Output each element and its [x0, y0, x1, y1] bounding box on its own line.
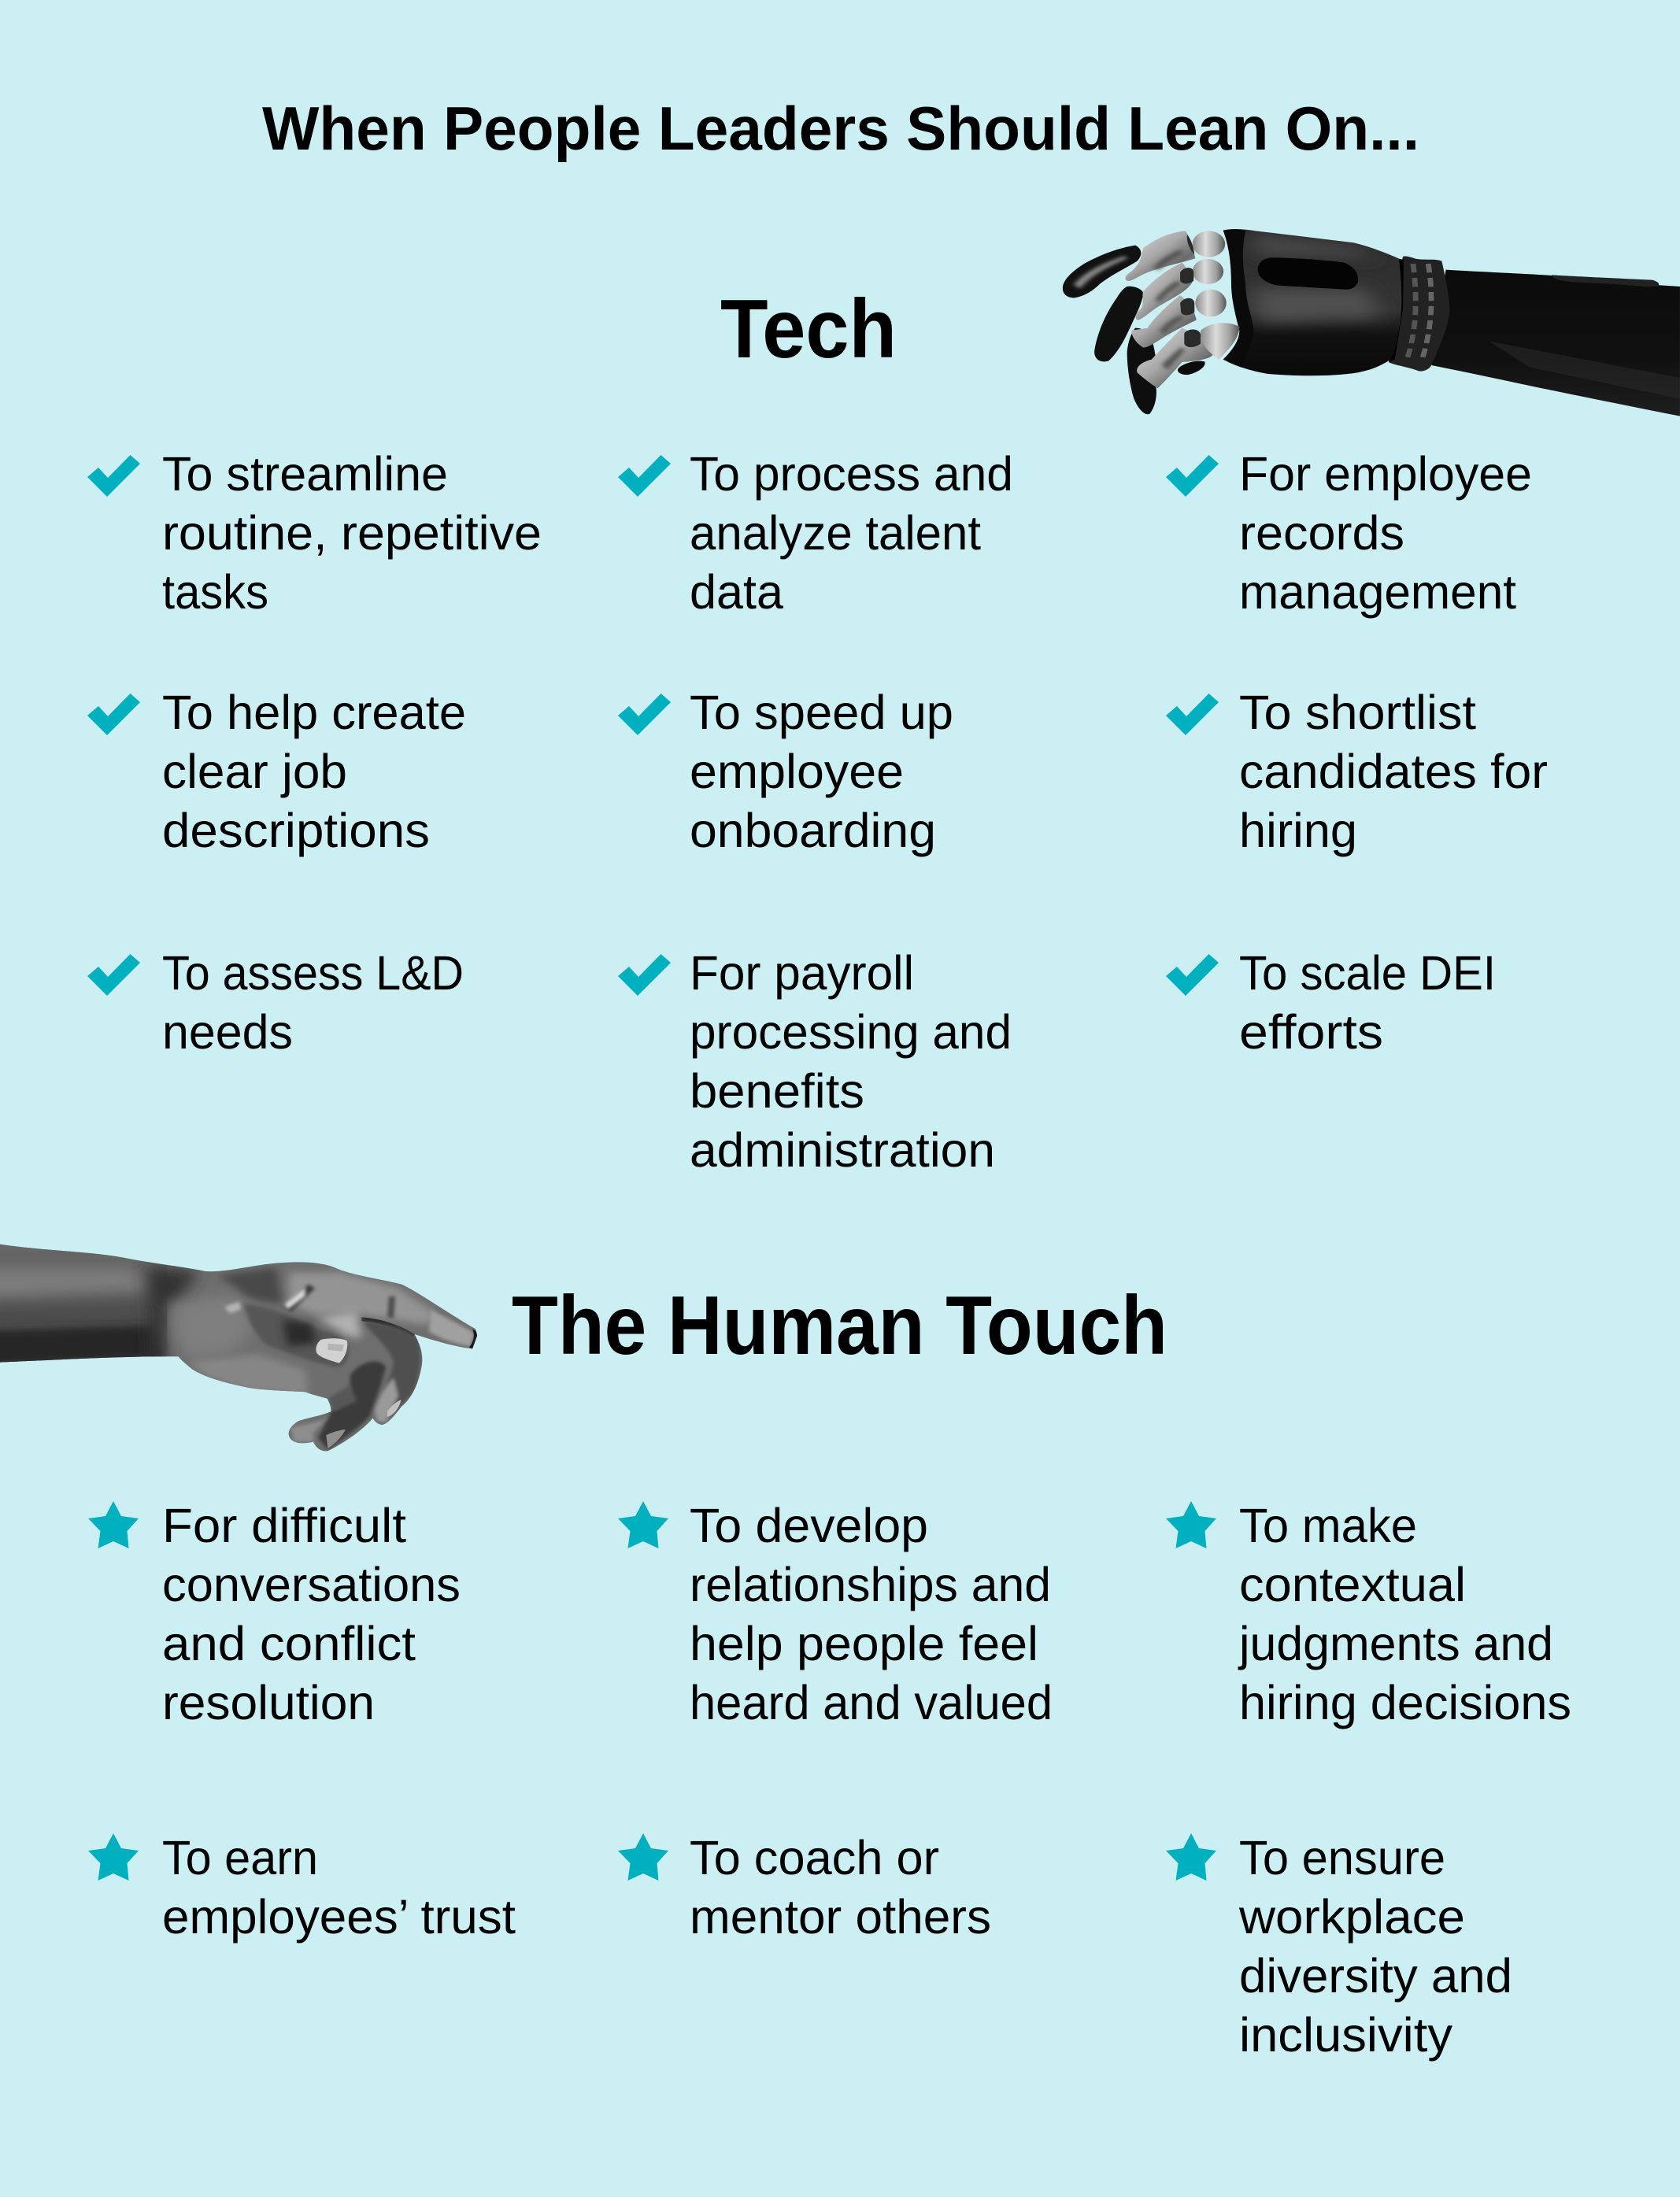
item: talent data: data [690, 565, 783, 619]
item: job descriptions [87, 686, 466, 857]
item: streamline tasks: routine, repetitive [162, 506, 542, 560]
upper hand and index finger [289, 1273, 434, 1325]
item: coach or mentor [618, 1831, 991, 1944]
item: diversity and inclusivity: diversity and [1239, 1949, 1512, 2003]
knuckles [1193, 231, 1225, 257]
palm interior [318, 1312, 361, 1338]
item: develop relationships: help people feel [690, 1617, 1038, 1670]
item: job descriptions: clear job [162, 745, 347, 798]
item: earn trust: employees’ trust [162, 1890, 516, 1944]
heading: Tech: Tech [720, 283, 897, 375]
item: shortlist candidates [1166, 686, 1548, 857]
item: L&D needs [87, 946, 464, 1059]
item: L&D needs: To assess L&D [162, 946, 464, 1000]
item: coach or mentor: To coach or [690, 1831, 939, 1884]
item: onboarding: onboarding [690, 804, 936, 857]
item: coach or mentor: mentor others [690, 1890, 991, 1944]
item: difficult conversations [88, 1499, 461, 1729]
item: employee records [1166, 447, 1532, 619]
lower palm [190, 1354, 309, 1396]
panel: human touch bullets [88, 1499, 1571, 2062]
item: difficult conversations: and conflict [162, 1617, 416, 1670]
lower fingertips [1094, 287, 1143, 361]
ring and little fingers [318, 1362, 386, 1450]
item: develop relationships: To develop [690, 1499, 928, 1552]
panel: tech bullets [87, 447, 1548, 1177]
item: difficult conversations: resolution [162, 1676, 375, 1729]
item: payroll and benefits: processing and [690, 1005, 1012, 1059]
item: shortlist candidates: hiring [1239, 804, 1357, 857]
item: talent data [618, 447, 1013, 619]
item: payroll and benefits: administration [690, 1123, 995, 1177]
title: When People Leaders Should Lean On... [262, 94, 1419, 163]
item: develop relationships: heard and valued [690, 1676, 1053, 1729]
index fingertip [1063, 246, 1141, 298]
item: scale DEI: efforts [1239, 1005, 1383, 1059]
item: diversity and inclusivity [1166, 1831, 1512, 2062]
item: payroll and benefits: For payroll [690, 946, 914, 1000]
item: streamline tasks: tasks [162, 565, 268, 619]
item: streamline tasks [87, 447, 542, 619]
item: job descriptions: descriptions [162, 804, 430, 857]
silver phalanges [1125, 231, 1195, 281]
item: shortlist candidates: To shortlist [1239, 686, 1476, 739]
item: employee records: For employee [1239, 447, 1532, 501]
item: shortlist candidates: candidates for [1239, 745, 1548, 798]
item: earn trust: To earn [162, 1831, 318, 1884]
image: robotic hand and forearm [1063, 229, 1680, 416]
item: diversity and inclusivity: workplace [1238, 1890, 1465, 1944]
item: payroll and benefits [618, 946, 1012, 1177]
item: earn trust [88, 1831, 516, 1944]
item: diversity and inclusivity: inclusivity [1239, 2008, 1453, 2062]
item: diversity and inclusivity: To ensure [1239, 1831, 1445, 1884]
item: talent data: analyze talent [690, 506, 981, 560]
item: scale DEI [1166, 946, 1496, 1059]
item: contextual judgments: To make [1239, 1499, 1417, 1552]
item: onboarding [618, 686, 953, 857]
item: streamline tasks: To streamline [162, 447, 448, 501]
item: difficult conversations: conversations [162, 1558, 461, 1611]
item: onboarding: employee [690, 745, 904, 798]
item: contextual judgments [1166, 1499, 1571, 1729]
item: employee records: management [1239, 565, 1516, 619]
item: talent data: To process and [690, 447, 1013, 501]
thumb [244, 1304, 349, 1367]
curled middle finger [363, 1321, 420, 1417]
item: job descriptions: To help create [162, 686, 466, 739]
item: develop relationships [618, 1499, 1053, 1729]
item: employee records: records [1239, 506, 1404, 560]
item: contextual judgments: judgments and [1238, 1617, 1553, 1670]
forearm [0, 1238, 167, 1364]
heading: The Human Touch: The Human Touch [512, 1279, 1167, 1372]
item: L&D needs: needs [162, 1005, 293, 1059]
image: human hand and forearm [0, 1238, 485, 1456]
item: contextual judgments: contextual [1239, 1558, 1466, 1611]
item: difficult conversations: For difficult [162, 1499, 406, 1552]
item: develop relationships: relationships and [690, 1558, 1051, 1611]
item: payroll and benefits: benefits [690, 1064, 864, 1118]
back of hand [173, 1293, 253, 1359]
item: scale DEI: To scale DEI [1239, 946, 1496, 1000]
item: onboarding: To speed up [690, 686, 953, 739]
item: contextual judgments: hiring decisions [1239, 1676, 1571, 1729]
